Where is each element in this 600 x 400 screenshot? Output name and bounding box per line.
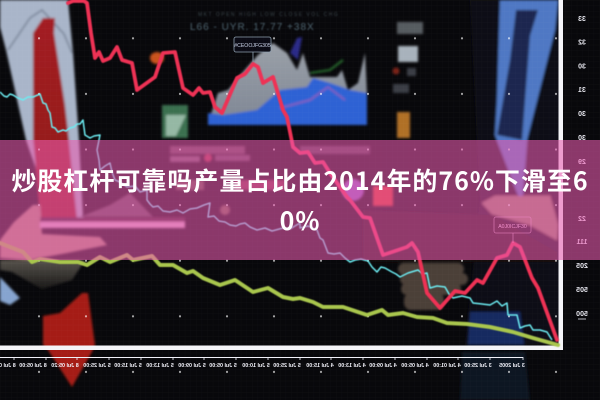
y axis with mirrored value labels: 33 xyxy=(578,16,586,23)
screen reflection under band xyxy=(80,193,153,217)
x axis with mirrored date labels: 5 Jul 10:00 xyxy=(242,363,270,369)
lower red tie xyxy=(43,293,95,387)
translucent pink title band xyxy=(0,140,600,260)
y axis with mirrored value labels: 30 xyxy=(578,64,586,70)
cyan price line xyxy=(0,92,552,340)
x axis with mirrored date labels: 5 Jul 25:00 xyxy=(83,363,111,369)
green trend line xyxy=(0,243,558,345)
y axis with mirrored value labels: 29 xyxy=(578,159,586,166)
lower blue shirt xyxy=(468,312,524,345)
red tie xyxy=(33,18,77,217)
right businessman xyxy=(363,0,560,400)
y axis with mirrored value labels: 205 xyxy=(576,263,588,270)
fist xyxy=(398,263,468,310)
purple region xyxy=(290,37,302,60)
x axis with mirrored date labels: 3 Jul 25:00 xyxy=(464,363,492,369)
x axis with mirrored date labels: 5 Jul 25:00 xyxy=(273,363,301,369)
dark blue tie xyxy=(497,10,538,140)
x axis with mirrored date labels: 4 Jul 09:00 xyxy=(369,363,397,369)
green trace xyxy=(310,60,343,73)
x axis with mirrored date labels: 4 Jul 13:00 xyxy=(338,363,366,369)
title xyxy=(11,162,589,238)
x axis with mirrored date labels: 3 Jul 2005 xyxy=(499,363,525,369)
y axis with mirrored value labels: 32 xyxy=(578,40,586,46)
y axis with mirrored value labels: 500 xyxy=(576,311,588,318)
y axis with mirrored value labels xyxy=(576,16,588,319)
y axis with mirrored value labels: 111 xyxy=(576,239,587,246)
purple and orange reflection xyxy=(342,179,364,201)
central trading screen xyxy=(80,12,423,217)
x axis with mirrored date labels: 5 Jul 09:00 xyxy=(178,363,206,369)
central trading screen: MKT OPEN HIGH LOW CLOSE VOL CHG xyxy=(198,12,339,18)
shirt xyxy=(0,0,83,217)
title: 炒股杠杆可靠吗产量占比由2014年的76%下滑至6 xyxy=(11,162,589,198)
right hand xyxy=(482,196,558,240)
x axis with mirrored date labels: 8 Jul 05:00 xyxy=(19,363,47,369)
y axis with mirrored value labels: 30 xyxy=(578,135,586,142)
blue area chart xyxy=(208,78,367,125)
x axis with mirrored date labels: 5 Jul 13:00 xyxy=(146,363,174,369)
magenta trace xyxy=(280,87,345,108)
x axis with mirrored date labels: 4 Jul 05:00 xyxy=(401,363,429,369)
green block xyxy=(162,105,188,138)
blue shirt xyxy=(495,0,558,205)
second ticker tag: A0J0ICJF30 xyxy=(498,224,527,230)
y axis with mirrored value labels: 30 xyxy=(578,111,586,118)
y axis with mirrored value labels: 505 xyxy=(576,287,588,294)
left hand xyxy=(0,205,107,260)
x axis with mirrored date labels: 8 Jul 05:20 xyxy=(51,363,79,369)
y axis with mirrored value labels: 22 xyxy=(578,216,586,223)
x axis with mirrored date labels: 5 Jul 05:00 xyxy=(209,363,237,369)
mountain chart grey xyxy=(208,43,367,125)
x axis with mirrored date labels xyxy=(0,357,525,369)
title: 0% xyxy=(280,202,320,238)
x axis with mirrored date labels: 4 Jul 15:00 xyxy=(306,363,334,369)
ticker tag xyxy=(234,37,271,62)
collar shadow xyxy=(8,10,72,53)
side widgets xyxy=(397,22,423,34)
y axis with mirrored value labels: 31 xyxy=(578,87,586,94)
left businessman xyxy=(0,0,185,387)
x axis with mirrored date labels: 5 Jul 15:00 xyxy=(114,363,142,369)
orange blob xyxy=(150,52,164,64)
x axis with mirrored date labels: 4 Jul 01:00 xyxy=(433,363,461,369)
grey sleeve xyxy=(0,260,85,289)
screen header text: L66 - UYR. 17.77 +38X xyxy=(190,22,315,33)
blue cuff xyxy=(0,277,20,305)
tablet edge xyxy=(363,210,557,262)
tablet strip xyxy=(40,222,185,228)
second ticker tag xyxy=(494,217,531,243)
ticker tag: #CEOOJFG305 xyxy=(234,43,271,49)
red price line xyxy=(68,1,557,340)
jacket xyxy=(465,0,560,345)
